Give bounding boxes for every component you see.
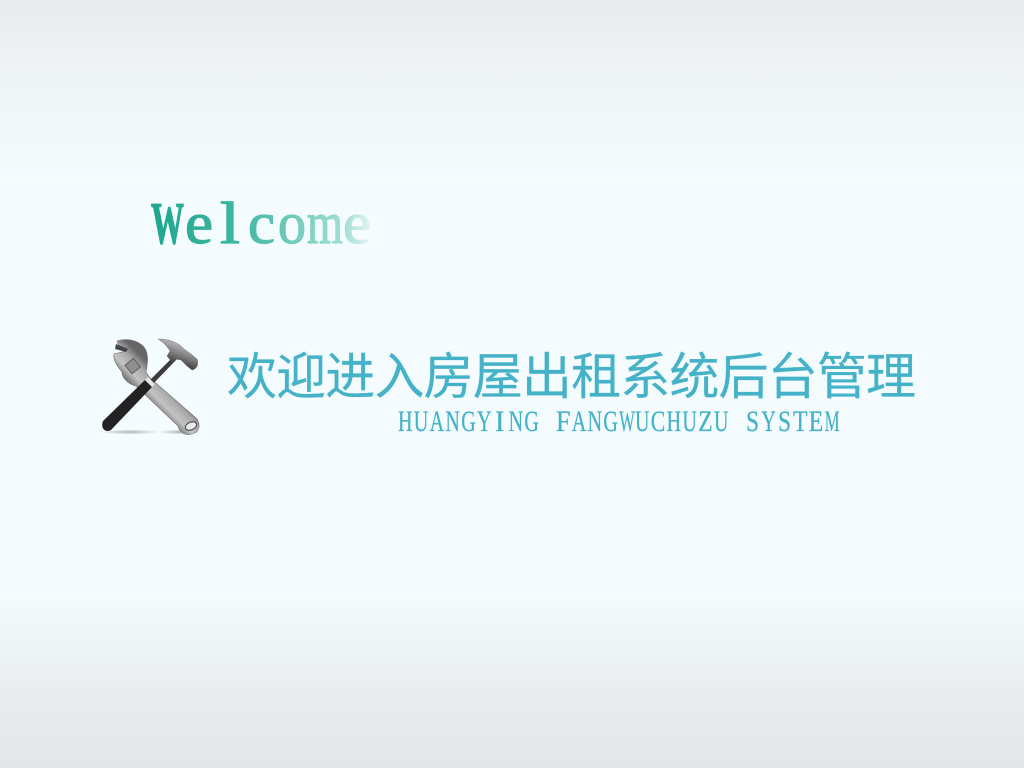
subtitle: system name: M xyxy=(825,405,840,438)
subtitle: system name: N xyxy=(445,405,460,438)
heading: Chinese welcome title: 欢迎进入房屋出租系统后台管理 xyxy=(227,349,916,405)
heading: Welcome: e xyxy=(185,190,213,256)
subtitle: system name: U xyxy=(714,405,729,438)
subtitle: system name: G xyxy=(524,405,539,438)
heading: Welcome: o xyxy=(278,190,306,256)
subtitle: system name: U xyxy=(635,405,650,438)
heading: Welcome: W xyxy=(151,190,184,256)
subtitle: system name: U xyxy=(414,405,429,438)
subtitle: system name: A xyxy=(430,405,444,438)
subtitle: system name: Y xyxy=(477,405,492,438)
subtitle: system name: S xyxy=(778,405,791,438)
subtitle: system name: U xyxy=(682,405,697,438)
subtitle: system name: T xyxy=(793,405,808,438)
subtitle: system name: N xyxy=(588,405,602,438)
subtitle: system name: Y xyxy=(761,405,776,438)
subtitle: system name: I xyxy=(495,405,504,438)
subtitle: system name: E xyxy=(809,405,823,438)
subtitle: system name: F xyxy=(556,405,570,438)
subtitle: system name: H xyxy=(398,405,412,438)
subtitle: system name: Z xyxy=(698,405,713,438)
subtitle: system name: N xyxy=(509,405,523,438)
subtitle: system name: G xyxy=(603,405,618,438)
subtitle: system name: C xyxy=(651,405,665,438)
heading: Welcome: l xyxy=(220,190,240,256)
subtitle: system name: W xyxy=(619,405,635,438)
subtitle: system name: S xyxy=(746,405,759,438)
heading: Welcome: m xyxy=(307,190,343,256)
heading: Welcome: c xyxy=(248,190,275,256)
subtitle: system name: A xyxy=(572,405,587,438)
icon: crossed wrench and hammer xyxy=(100,339,202,435)
heading: Welcome: e xyxy=(343,190,371,256)
subtitle: system name: H xyxy=(667,405,681,438)
subtitle: system name: G xyxy=(461,405,476,438)
